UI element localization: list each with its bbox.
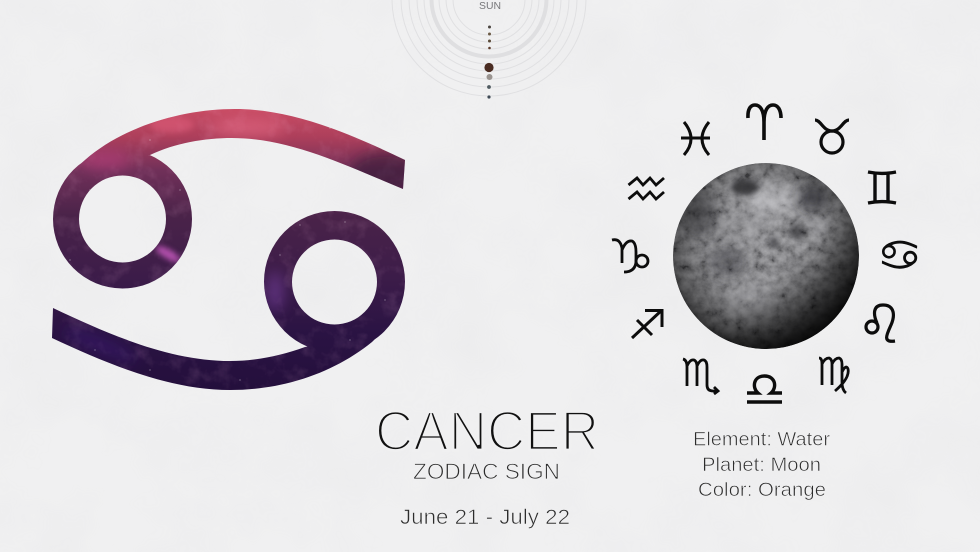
icon: cancer [882,241,917,269]
zodiac wheel [612,105,917,402]
icon: gemini [868,172,896,203]
icon: aquarius [628,178,664,199]
planets [484,26,494,99]
icon: pisces [681,122,710,155]
icon: virgo [819,358,848,393]
sign attributes [693,428,831,501]
solar system diagram [392,0,586,99]
planet: Planet: Moon [702,454,821,476]
icon: aries [748,105,781,140]
date range: June 21 - July 22 [400,506,570,529]
label: sun: SUN [479,0,501,12]
icon: libra [747,376,782,402]
icon: sagittarius [632,310,662,338]
icon: leo [866,305,895,341]
cancer symbol, large [52,109,405,390]
element: Element: Water [693,428,831,450]
subtitle: ZODIAC SIGN [413,459,560,484]
moon [670,160,862,352]
icon: capricorn [612,240,648,272]
icon: scorpio [683,359,718,394]
icon: taurus [815,120,849,153]
color: Color: Orange [698,479,826,501]
title: CANCER [375,399,599,462]
